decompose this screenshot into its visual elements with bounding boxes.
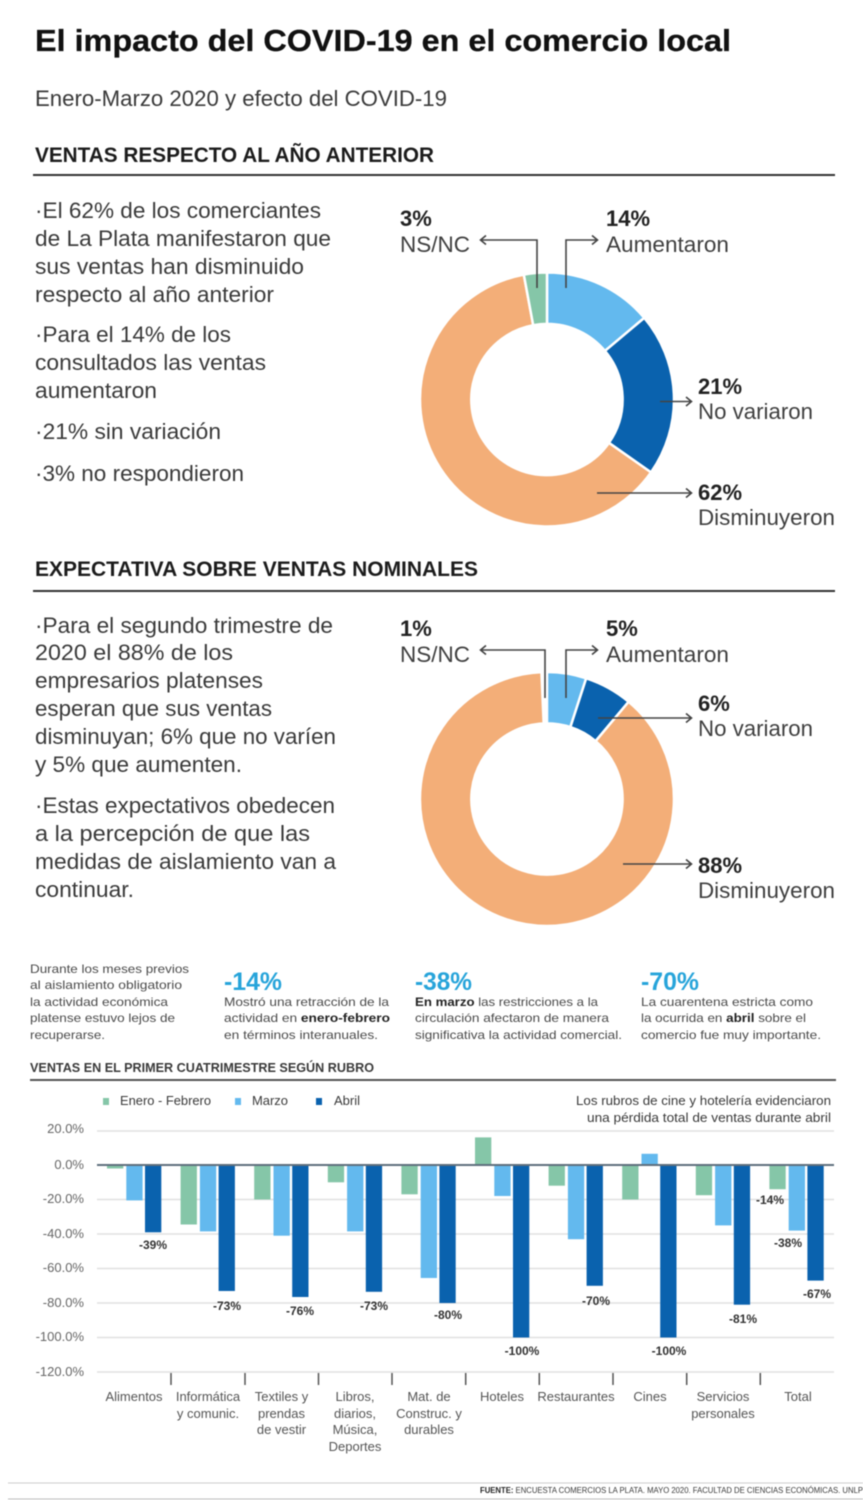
bars: Mat. de Construc. y durables [401,1165,456,1303]
text block: expectativa bullets: esperan que sus ventas [35,696,272,721]
data labels: -100% [505,1344,540,1358]
label and arrow: Aumentaron 14%: Aumentaron [606,232,729,257]
chart note: Los rubros de cine y hotelería evidenciaron [576,1094,831,1108]
label and arrow: NS/NC 3%: NS/NC [400,232,470,257]
stat: -38%: circulación afectaron de manera [415,1011,609,1025]
stat: -70%: la ocurrida en abril sobre el [641,1011,806,1025]
bars: Cines [622,1154,676,1338]
category labels: Hoteles [480,1389,525,1404]
bars: Servicios personales [696,1165,750,1305]
category labels: diarios, [334,1406,376,1421]
label and arrow: Aumentaron 5% [566,616,729,698]
stat: -70%: -70% [641,968,699,996]
category labels: Textiles y [255,1389,309,1404]
y axis labels: -20.0% [43,1191,84,1206]
data labels: -100% [652,1344,687,1358]
data labels: -67% [803,1287,831,1301]
label and arrow: Disminuyeron 62% [597,480,835,530]
subtitle: Enero-Marzo 2020 y efecto del COVID-19 [35,86,447,111]
category labels: Construc. y [396,1406,462,1421]
bars: Alimentos [107,1165,161,1232]
stat: -14% [224,968,390,1042]
data labels: -70% [582,1294,610,1308]
stat: -38%: En marzo las restricciones a la [415,995,598,1009]
data labels [139,1193,831,1358]
y axis labels [36,1121,84,1379]
text block: ventas bullets: ·3% no respondieron [35,461,244,486]
chart note [576,1094,831,1125]
stat: -70% [641,968,821,1042]
y axis labels: -100.0% [36,1329,84,1344]
text block: ventas bullets: consultados las ventas [35,350,266,375]
heading: ventas respecto al año anterior: VENTAS RESPECTO AL AÑO ANTERIOR [35,144,434,167]
heading: ventas en el primer cuatrimestre: VENTAS EN EL PRIMER CUATRIMESTRE SEGÚN RUBRO [30,1060,374,1075]
text block: ventas bullets: ·Para el 14% de los [35,322,231,347]
text block: expectativa bullets: 2020 el 88% de los [35,640,233,665]
bars: Restaurantes [549,1165,603,1286]
y axis labels: 20.0% [47,1121,84,1136]
label and arrow: No variaron 21% [660,374,813,424]
bars: Total [769,1165,824,1281]
text block: intro to activity: Durante los meses previos [30,962,189,976]
label and arrow: Disminuyeron 62%: 62% [698,480,742,505]
label and arrow: NS/NC 3%: 3% [400,206,432,231]
category labels: personales [691,1406,755,1421]
category labels: y comunic. [177,1406,239,1421]
label and arrow: NS/NC 1% [400,616,545,698]
text block: intro to activity: recuperarse. [30,1028,105,1042]
stat: -38%: significativa la actividad comercial. [415,1028,622,1042]
category labels [105,1389,812,1454]
label and arrow: No variaron 6%: No variaron [698,716,813,741]
text block: expectativa bullets: ·Estas expectativos obedecen [35,793,335,818]
donut chart: ventas respecto al año anterior [420,272,674,526]
category labels: Restaurantes [537,1389,615,1404]
category labels: Total [784,1389,812,1404]
chart note: una pérdida total de ventas durante abril [587,1111,831,1125]
label and arrow: Aumentaron 14%: 14% [606,206,650,231]
label and arrow: Disminuyeron 88% [623,853,835,903]
label and arrow: NS/NC 1%: NS/NC [400,642,470,667]
text block: expectativa bullets: disminuyan; 6% que no varíen [35,724,336,749]
label and arrow: Disminuyeron 62%: Disminuyeron [698,505,835,530]
text block: ventas bullets: de La Plata manifestaron que [35,226,331,251]
data labels: -38% [774,1236,802,1250]
label and arrow: Aumentaron 14% [566,206,729,288]
data labels: -14% [756,1193,784,1207]
y axis labels: -60.0% [43,1260,84,1275]
category labels: Deportes [329,1439,382,1454]
label and arrow: Disminuyeron 88%: 88% [698,853,742,878]
text block: expectativa bullets [35,613,337,902]
category axis ticks [171,1373,760,1385]
text block: expectativa bullets: y 5% que aumenten. [35,752,242,777]
category labels: Alimentos [105,1389,163,1404]
label and arrow: No variaron 6% [598,691,813,741]
category labels: Cines [633,1389,667,1404]
data labels: -39% [139,1238,167,1252]
label and arrow: NS/NC 3% [400,206,537,288]
text block: expectativa bullets: continuar. [35,877,134,902]
text block: expectativa bullets: medidas de aislamiento van a [35,849,337,874]
label and arrow: Aumentaron 5%: Aumentaron [606,642,729,667]
data labels: -80% [434,1308,462,1322]
data labels: -73% [213,1299,241,1313]
stat: -14%: -14% [224,968,282,996]
text block: intro to activity: la actividad económica [30,995,168,1009]
label and arrow: Aumentaron 5%: 5% [606,616,638,641]
bars: Textiles y prendas de vestir [254,1165,308,1297]
category labels: durables [404,1422,454,1437]
category labels: Servicios [697,1389,750,1404]
heading: expectativa sobre ventas nominales: EXPECTATIVA SOBRE VENTAS NOMINALES [35,558,478,581]
legend: Marzo [252,1094,288,1108]
text block: ventas bullets: ·21% sin variación [35,419,221,444]
stat: -14%: en términos interanuales. [224,1028,378,1042]
stat: -70%: La cuarentena estricta como [641,995,813,1009]
stat: -14%: actividad en enero-febrero [224,1011,390,1025]
bars: Libros, diarios, Música, Deportes [328,1165,382,1292]
stat: -38% [415,968,622,1042]
category labels: Informática [176,1389,241,1404]
label and arrow: No variaron 21%: 21% [698,374,742,399]
category labels: Música, [333,1422,377,1437]
stat: -70%: comercio fue muy importante. [641,1028,821,1042]
category labels: de vestir [257,1422,307,1437]
bars: Hoteles [475,1137,529,1338]
title: El impacto del COVID-19 en el comercio local [35,23,731,58]
text block: expectativa bullets: empresarios platenses [35,668,263,693]
category labels: Mat. de [407,1389,451,1404]
text block: ventas bullets: aumentaron [35,378,157,403]
bar chart: ventas según rubro [36,1121,834,1454]
bars: Informática y comunic. [181,1165,235,1291]
text block: intro to activity [30,962,189,1042]
data labels: -76% [286,1304,314,1318]
label and arrow: No variaron 21%: No variaron [698,399,813,424]
text block: expectativa bullets: a la percepción de que las [35,821,310,846]
text block: ventas bullets: sus ventas han disminuido [35,254,304,279]
stat: -38%: -38% [415,968,472,996]
label and arrow: NS/NC 1%: 1% [400,616,432,641]
data labels: -73% [360,1299,388,1313]
stat: -14%: Mostró una retracción de la [224,995,389,1009]
y axis labels: 0.0% [54,1157,84,1172]
label and arrow: Disminuyeron 88%: Disminuyeron [698,878,835,903]
text block: intro to activity: platense estuvo lejos de [30,1011,175,1025]
data labels: -81% [729,1312,757,1326]
y axis labels: -120.0% [36,1364,84,1379]
y axis labels: -80.0% [43,1295,84,1310]
text block: intro to activity: al aislamiento obligatorio [30,978,182,992]
text block: ventas bullets: ·El 62% de los comerciantes [35,198,321,223]
y axis labels: -40.0% [43,1226,84,1241]
legend [103,1094,360,1108]
legend: Enero - Febrero [120,1094,211,1108]
text block: ventas bullets [35,198,331,486]
text block: expectativa bullets: ·Para el segundo trimestre de [35,613,333,638]
legend: Abril [334,1094,360,1108]
donut chart: expectativa sobre ventas nominales [420,672,674,926]
category labels: Libros, [335,1389,375,1404]
text block: ventas bullets: respecto al año anterior [35,282,274,307]
category labels: prendas [258,1406,305,1421]
label and arrow: No variaron 6%: 6% [698,691,730,716]
